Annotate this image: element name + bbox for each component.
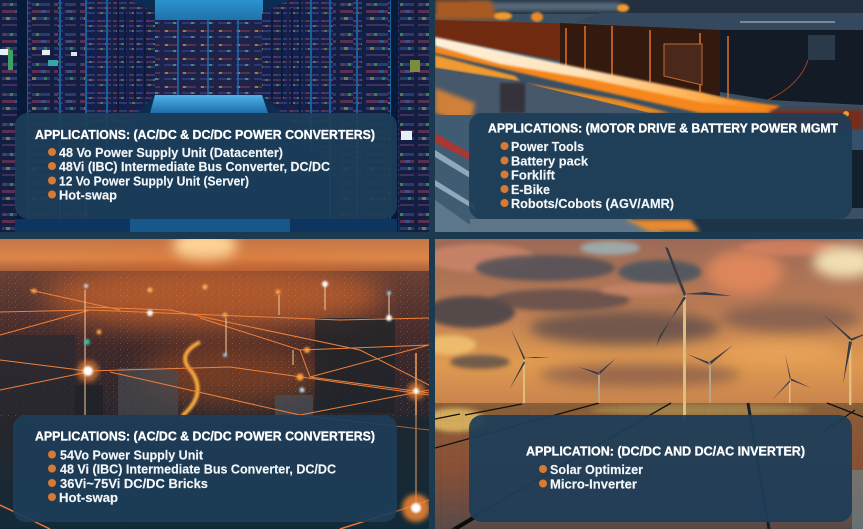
- item: Hot-swap: [59, 188, 117, 202]
- overlay panel: [469, 113, 852, 219]
- item: Solar Optimizer: [550, 462, 643, 477]
- item: 36Vi~75Vi DC/DC Bricks: [60, 476, 208, 491]
- item: Battery pack: [511, 154, 589, 168]
- item: [500, 141, 584, 152]
- panel: telecom city network: [0, 230, 430, 529]
- panel: motor drive and battery: [435, 0, 863, 232]
- item: Robots/Cobots (AGV/AMR): [511, 196, 674, 211]
- photo: solar field: [425, 403, 863, 529]
- list: solar applications: [539, 462, 643, 492]
- item: [500, 170, 555, 180]
- item: 54Vo Power Supply Unit: [60, 448, 204, 462]
- turbine: [772, 354, 811, 403]
- heading: APPLICATIONS: (MOTOR DRIVE & BATTERY POWER MGMT: [488, 122, 838, 136]
- item: 48 Vi (IBC) Intermediate Bus Converter, DC/DC: [60, 462, 337, 476]
- overlay panel: [15, 113, 397, 219]
- overlay panel: [469, 415, 852, 522]
- photo: glowing machine: [435, 0, 863, 232]
- item: Micro-Inverter: [550, 476, 637, 492]
- heading: APPLICATION: (DC/DC AND DC/AC INVERTER): [526, 444, 805, 458]
- item: [500, 184, 550, 194]
- item: Hot-swap: [59, 490, 118, 505]
- turbine: [509, 329, 550, 403]
- overlay panel: [13, 415, 397, 522]
- item: E-Bike: [511, 182, 550, 197]
- item: [48, 478, 208, 488]
- photo: sky with clouds: [424, 239, 863, 404]
- item: 48 Vo Power Supply Unit (Datacenter): [59, 145, 283, 160]
- list: telecom applications: [48, 448, 337, 505]
- item: 48Vi (IBC) Intermediate Bus Converter, DC/DC: [59, 159, 331, 174]
- heading: APPLICATIONS: (AC/DC & DC/DC POWER CONVERTERS): [35, 430, 375, 444]
- turbine: [656, 247, 732, 420]
- item: Forklift: [511, 168, 556, 182]
- heading: APPLICATIONS: (AC/DC & DC/DC POWER CONVERTERS): [35, 128, 375, 142]
- icon: wind turbines: [509, 247, 863, 420]
- turbine: [823, 314, 863, 405]
- list: motor and battery applications: [500, 139, 674, 211]
- turbine: [579, 358, 616, 403]
- panel: data center: [0, 0, 429, 250]
- panel: renewable energy: [424, 239, 863, 529]
- photo: server room: [0, 0, 429, 250]
- list: converter applications: [48, 145, 331, 202]
- photo: city at dusk: [0, 230, 430, 529]
- item: Power Tools: [511, 139, 584, 154]
- turbine: [687, 345, 733, 403]
- item: 12 Vo Power Supply Unit (Server): [59, 174, 249, 188]
